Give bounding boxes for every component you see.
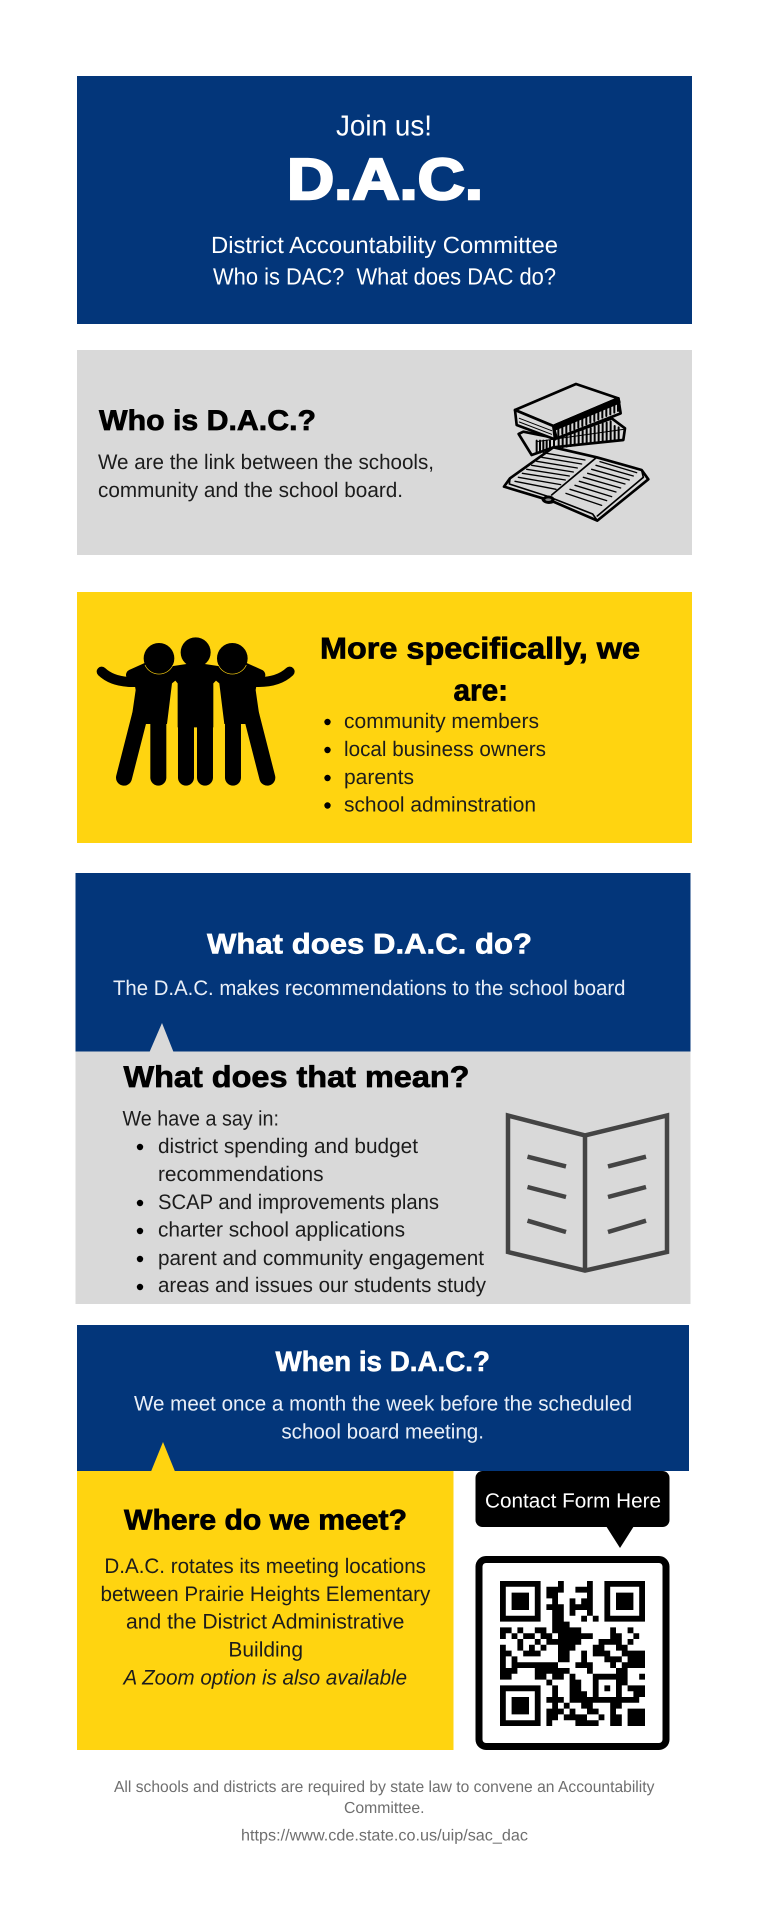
- text: join us: Join us!: [336, 110, 432, 142]
- list: we have a say in: areas and issues our students study: [158, 1274, 486, 1297]
- heading: where do we meet: Where do we meet?: [124, 1505, 407, 1537]
- list: who we are: parents: [344, 766, 414, 789]
- text: who description: We are the link between the schools,: [98, 451, 434, 474]
- list: we have a say in: SCAP and improvements plans: [158, 1191, 439, 1214]
- list: who we are: local business owners: [344, 738, 546, 761]
- text: meeting locations: Building: [228, 1639, 303, 1662]
- text: meeting schedule: [134, 1393, 632, 1443]
- text: recommendations: The D.A.C. makes recommendations to the school board: [113, 977, 626, 1000]
- text: meeting locations: between Prairie Heights Elementary: [100, 1583, 431, 1606]
- text: meeting locations: and the District Administrative: [126, 1611, 404, 1634]
- footer: url: https://www.cde.state.co.us/uip/sac_dac: [241, 1828, 528, 1844]
- text: who description: [98, 451, 434, 502]
- footer: state law note: Committee.: [344, 1800, 424, 1817]
- text: meeting locations: D.A.C. rotates its meeting locations: [104, 1555, 426, 1578]
- QR code: [479, 1560, 666, 1746]
- list: we have a say in: district spending and budget: [158, 1135, 418, 1158]
- panel: more specifically: [77, 592, 692, 843]
- panel: what does D.A.C. do: [76, 873, 690, 1052]
- callout: contact form: Contact Form Here: [485, 1490, 661, 1513]
- title: D.A.C.: D.A.C.: [287, 147, 483, 212]
- panel: what does that mean: [76, 1023, 690, 1304]
- text: meeting locations: [100, 1555, 431, 1689]
- list: we have a say in: parent and community engagement: [158, 1247, 484, 1270]
- text: meeting schedule: school board meeting.: [281, 1420, 484, 1443]
- panel: when is D.A.C.: [77, 1325, 689, 1471]
- panel: where do we meet: [77, 1442, 454, 1750]
- heading: what does that mean: What does that mean?: [124, 1061, 470, 1094]
- heading: more specifically: [320, 632, 640, 708]
- heading: who is D.A.C.: Who is D.A.C.?: [99, 405, 316, 437]
- subtitle: questions: Who is DAC? What does DAC do?: [213, 264, 556, 290]
- footer: state law note: All schools and districts are required by state law to convene an Accountability: [114, 1779, 654, 1796]
- list: we have a say in: [122, 1108, 486, 1297]
- panel: header: [77, 76, 692, 324]
- arrow: pointer up yellow: [151, 1442, 175, 1472]
- heading: more specifically: are:: [454, 674, 508, 708]
- heading: more specifically: More specifically, we: [320, 632, 640, 666]
- footer: state law note: [114, 1779, 654, 1817]
- arrow: pointer up: [150, 1023, 174, 1052]
- icon: three people: [102, 637, 290, 778]
- heading: when is D.A.C.: When is D.A.C.?: [276, 1346, 490, 1377]
- heading: what does D.A.C. do: What does D.A.C. do?: [207, 928, 532, 960]
- panel: who is D.A.C.: [77, 350, 692, 555]
- list: who we are: community members: [344, 710, 539, 733]
- callout: contact form: [476, 1471, 670, 1548]
- list: we have a say in: charter school applications: [158, 1219, 405, 1242]
- icon: stack of books: [504, 384, 648, 521]
- list: who we are: school adminstration: [344, 794, 536, 817]
- list: we have a say in: We have a say in:: [122, 1108, 279, 1131]
- text: who description: community and the school board.: [98, 479, 403, 502]
- text: meeting locations: A Zoom option is also available: [122, 1666, 407, 1689]
- subtitle: committee name: District Accountability Committee: [211, 232, 558, 258]
- list: we have a say in: recommendations: [158, 1163, 324, 1186]
- list: who we are: [324, 710, 546, 817]
- icon: open booklet: [508, 1116, 667, 1271]
- text: meeting schedule: We meet once a month the week before the scheduled: [134, 1393, 632, 1416]
